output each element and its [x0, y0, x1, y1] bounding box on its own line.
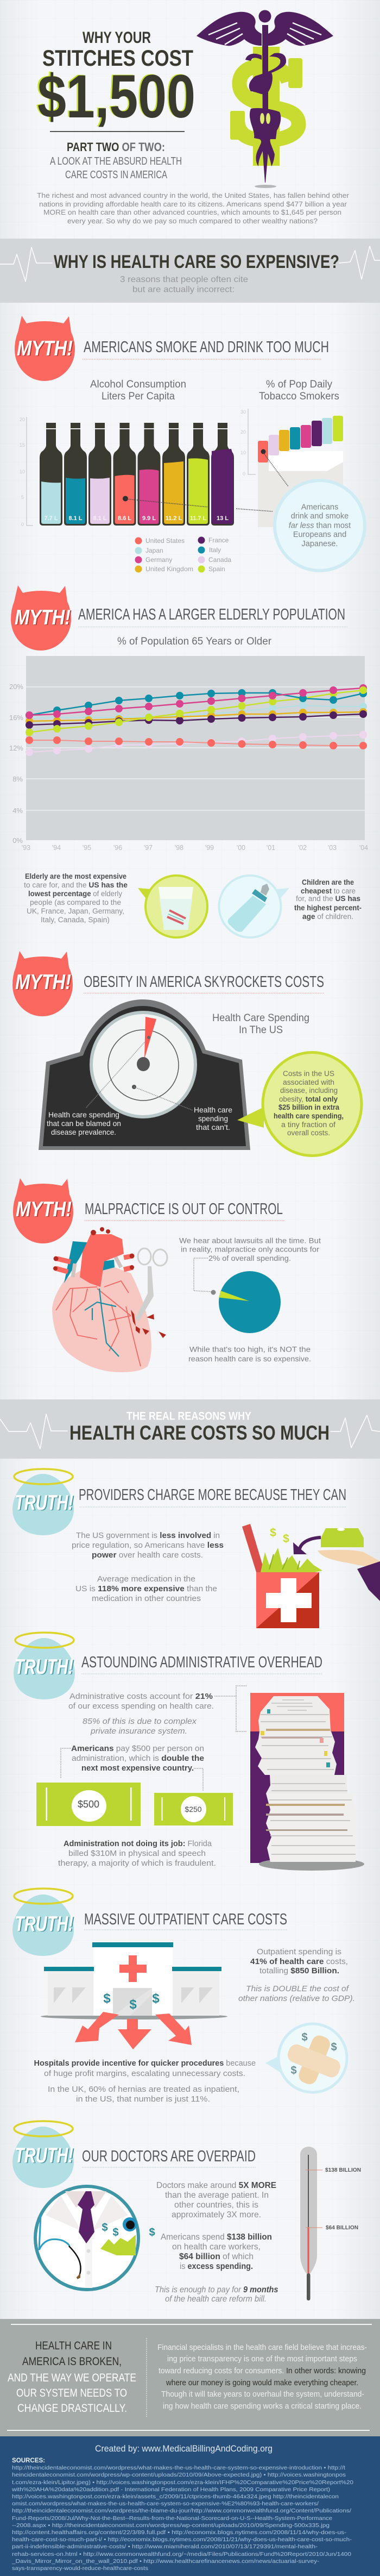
panel: credits and sources: omist.com/wordpress/what-makes-the-us-health-care-system-so-expensive-%E2%80%93-health-care-workers/: [12, 2500, 319, 2507]
illustration: doctor coat: $: [112, 2227, 119, 2239]
text: too high: reason health care is so expensive.: [188, 1354, 311, 1363]
panel: credits and sources: heincidentaleconomist.com/wordpress/wp-content/uploads/2010/09/Above-expected.jpg) • http://voices.washingtonpos: [12, 2472, 346, 2478]
illustration: scale: Health care spending: [48, 1110, 119, 1119]
panel: credits and sources: rehab-services-on.html • http://www.commonwealthfund.org/~/media/Files/Publications/Fund%20Report/2010/Jun/1400: [12, 2551, 351, 2558]
callout: costs associated with disease: health care spending,: [274, 1112, 344, 1120]
chart: alcohol bottles: 13 L: [217, 515, 229, 522]
text: children: the highest percent-: [294, 904, 362, 912]
text: hospitals incentive: of huge profit margins, escalating unnecessary costs.: [44, 2069, 245, 2078]
text: administrative costs: [68, 1692, 214, 1773]
text: elderly: [24, 872, 128, 924]
panel: conclusion: OUR SYSTEM NEEDS TO: [16, 2387, 127, 2399]
text: administration not doing its job: billed $310M in physical and speech: [68, 1849, 206, 1858]
legend: Italy: [209, 546, 221, 554]
text: administration not doing its job: [58, 1839, 216, 1868]
icon: 500 dollar bill: [36, 1783, 141, 1826]
legend: Germany: [145, 556, 172, 564]
illustration: doctor coat: [35, 2186, 155, 2290]
text: lawsuits: We hear about lawsuits all the time. But: [179, 1236, 321, 1245]
callout: drink and smoke less: far less than most: [289, 522, 351, 530]
text: lawsuits: 2% of overall spending.: [208, 1254, 291, 1262]
intro paragraph: [37, 192, 349, 225]
callout: drink and smoke less: Americans: [301, 503, 338, 512]
callout: drink and smoke less: Europeans and: [293, 530, 346, 539]
line chart: population over 65: '94: [52, 844, 61, 852]
text: doctors pay: Doctors make around 5X MORE: [156, 2181, 276, 2190]
truth badge 4: [12, 2121, 74, 2188]
panel: conclusion: CHANGE DRASTICALLY.: [17, 2402, 127, 2415]
text: doctors pay: is excess spending.: [180, 2262, 253, 2271]
text: hospitals incentive: Hospitals provide incentive for quicker procedures because: [34, 2059, 256, 2068]
title block: $1,500: [36, 62, 194, 130]
panel: credits and sources: with%20AHA%20data%20addition.pdf - International Federation of Health Plans, 2009 Comparative Price Report): [11, 2486, 330, 2493]
panel: credits and sources: http://theincidentaleconomist.com/wordpress/what-makes-the-us-health-care-system-so-expensive-introduction • http://t: [12, 2465, 345, 2471]
chart titles: Liters Per Capita: [102, 391, 175, 402]
illustration: heart with scissors: [52, 1227, 167, 1372]
chart: alcohol bottles: [20, 417, 234, 527]
text: hospitals incentive: in the US, that number is just 11%.: [76, 2094, 210, 2104]
band: the real reasons: HEALTH CARE COSTS SO MUCH: [69, 1422, 330, 1444]
heading: doctors overpaid: OUR DOCTORS ARE OVERPAID: [82, 2148, 256, 2165]
truth badge 2: [14, 1633, 75, 1699]
panel: credits and sources: http://voices.washingtonpost.com/ezra-klein/assets_c/2009/11/ctprices-thumb-464x324.jpeg http://theincidentalecon: [12, 2493, 339, 2500]
text: price regulation: [72, 1531, 224, 1603]
truth badge 3: TRUTH!: [15, 1912, 73, 1936]
line chart: population over 65: 20%: [9, 683, 23, 691]
text: doctors pay: approximately 3X more.: [172, 2210, 261, 2219]
panel: credits and sources: Fund-Reports/2008/Jul/Why-Not-the-Best--Results-from-the-National-Scorecard-on-U-S--Health-System-Performance: [12, 2515, 332, 2522]
icon: 500 dollar bill: $500: [78, 1799, 99, 1810]
text: doctors pay: other countries, this is: [174, 2200, 258, 2210]
title block: [36, 29, 195, 181]
callout: drink and smoke less: Japanese.: [302, 540, 338, 548]
text: administrative costs: 85% of this is due to complex: [83, 1717, 197, 1726]
icon: baby bottle: [219, 876, 289, 937]
callout: costs associated with disease: $25 billion in extra: [278, 1103, 339, 1111]
illustration: scale: that can be blamed on: [47, 1119, 121, 1128]
callout: costs associated with disease: disease, including: [280, 1086, 338, 1095]
line chart: population over 65: '97: [144, 844, 153, 852]
text: administrative costs: next most expensive country.: [81, 1764, 194, 1773]
text: administration not doing its job: Administration not doing its job: Florida: [64, 1839, 212, 1848]
icon: 250 dollar bill: $250: [185, 1805, 202, 1814]
chart: alcohol bottles: 11.7 L: [190, 515, 207, 522]
line chart: population over 65: 0%: [12, 836, 23, 845]
myth badge 3: [12, 951, 73, 1016]
panel: conclusion: Though it will take years to overhaul the system, understand-: [161, 2390, 364, 2399]
legend: Canada: [208, 556, 231, 564]
myth badge 3: MYTH!: [16, 971, 72, 995]
myth badge 1: MYTH!: [18, 337, 74, 361]
icon: bandage callout: [265, 2024, 349, 2093]
callout: costs associated with disease: a tiny fraction of: [281, 1121, 335, 1129]
line chart: population over 65: [9, 656, 368, 852]
line chart: population over 65: '02: [298, 844, 307, 852]
text: administration not doing its job: therapy, a majority of which is fraudulent.: [58, 1859, 216, 1868]
truth badge 1: TRUTH!: [15, 1491, 73, 1515]
text: children: Children are the: [302, 878, 354, 886]
illustration: scale: disease prevalence.: [51, 1128, 116, 1136]
chart: alcohol bottles: 20: [20, 417, 25, 422]
chart: alcohol bottles: 15: [20, 442, 25, 448]
text: children: for, and the US has: [296, 895, 360, 903]
panel: conclusion: toward reducing costs for consumers. In other words: knowing: [159, 2366, 366, 2375]
text: outpatient spending: other nations (relative to GDP).: [238, 1994, 355, 2003]
line chart: population over 65: '99: [205, 844, 214, 852]
text: lawsuits: in reality, malpractice only accounts for: [181, 1245, 319, 1254]
illustration: medical kit stuffed with money: [242, 1524, 380, 1628]
line chart: population over 65: '00: [237, 844, 245, 852]
myth badge 2: MYTH!: [15, 606, 71, 629]
text: health care spending in the us: [212, 1012, 309, 1036]
text: outpatient spending: totalling $850 Billion.: [259, 1966, 339, 1975]
chart titles: [90, 379, 339, 402]
text: price regulation: medication in other countries: [92, 1594, 201, 1603]
line chart: population over 65: '03: [328, 844, 337, 852]
heading: larger elderly population: [78, 606, 347, 647]
title block: CARE COSTS IN AMERICA: [65, 169, 167, 181]
chart: alcohol bottles: 10: [20, 469, 25, 474]
chart: tobacco smokers: 0: [243, 471, 245, 477]
panel: conclusion: where our money is going would make everything cheaper.: [166, 2378, 358, 2387]
chart titles: % of Pop Daily: [266, 379, 332, 390]
callout: costs associated with disease: obesity, total only: [279, 1095, 338, 1103]
myth badge 4: MYTH!: [17, 1198, 73, 1222]
truth badge 4: TRUTH!: [15, 2144, 73, 2167]
icon: bandage callout: $: [290, 2065, 297, 2077]
band: why is health care so expensive: 3 reasons that people often cite: [120, 275, 248, 284]
band: the real reasons: THE REAL REASONS WHY: [126, 1410, 251, 1423]
band: the real reasons: [0, 1399, 380, 1459]
illustration: scale: spending: [198, 1114, 228, 1123]
panel: credits and sources: health-care-cost-so-much-part-i/ • http://economix.blogs.nytimes.com/2008/11/21/why-does-us-health-care-cost-so-much-: [12, 2536, 352, 2543]
truth badge 1: [12, 1469, 74, 1535]
myth badge 2: MYTH!: [16, 607, 72, 630]
myth badge 2: [11, 585, 72, 651]
text: health care spending in the us: In The US: [239, 1024, 283, 1036]
chart: alcohol bottles: 8.6 L: [118, 515, 131, 522]
illustration: doctor coat: $: [102, 2222, 108, 2234]
text: price regulation: The US government is less involved in: [76, 1531, 220, 1540]
panel: credits and sources: part-ii-indefensible-administrative-costs/ • http://www.miamiherald.com/2010/07/13/1729391/mental-health-: [12, 2543, 318, 2550]
line chart: population over 65: '01: [267, 844, 275, 852]
line chart: population over 65: '95: [83, 844, 91, 852]
truth badge 1: TRUTH!: [16, 1492, 74, 1515]
line chart: population over 65: 16%: [9, 714, 23, 722]
text: doctors pay: Americans spend $138 billion: [161, 2233, 272, 2242]
icon: 250 dollar bill: [154, 1793, 233, 1825]
illustration: doctor coat: $: [149, 2227, 155, 2239]
chart: alcohol bottles: 8.1 L: [93, 515, 107, 522]
line chart: population over 65: '04: [359, 844, 368, 852]
text: hospitals incentive: In the UK, 60% of hernias are treated as inpatient,: [48, 2085, 239, 2094]
text: elderly: UK, France, Japan, Germany,: [27, 907, 124, 915]
chart: alcohol bottles: 11.2 L: [166, 515, 182, 522]
text: doctors pay: on health care workers,: [172, 2242, 261, 2252]
line chart: population over 65: 4%: [12, 806, 23, 815]
title block: A LOOK AT THE ABSURD HEALTH: [50, 155, 182, 167]
text: administrative costs: of our excess spending on health care.: [68, 1702, 214, 1711]
text: too high: While that's too high, it's NOT the: [189, 1345, 311, 1353]
line chart: population over 65: 12%: [9, 744, 23, 752]
legend: Spain: [208, 565, 225, 573]
text: elderly: Elderly are the most expensive: [25, 872, 126, 880]
panel: conclusion: AMERICA IS BROKEN,: [22, 2355, 122, 2368]
panel: credits and sources: t.com/ezra-klein/Lipitor.jpeg) • http://voices.washingtonpost.com/ezra-klein/IFHP%20Comparative%20Price%20Report%20: [12, 2479, 353, 2486]
text: too high: [188, 1345, 311, 1363]
truth badge 4: TRUTH!: [16, 2144, 74, 2168]
chart: tobacco smokers: [240, 409, 343, 527]
text: doctors pay: [155, 2181, 278, 2304]
line chart: population over 65: '98: [175, 844, 183, 852]
illustration: hospital: [41, 1942, 227, 2049]
legend: Japan: [145, 547, 163, 554]
legend: France: [208, 536, 229, 544]
text: elderly: people (as compared to the: [30, 898, 121, 906]
text: outpatient spending: [238, 1947, 355, 2003]
illustration: hospital: $: [103, 1991, 111, 2006]
panel: credits and sources: http://content.healthaffairs.org/content/22/3/89.full.pdf • http://economix.blogs.nytimes.com/2008/11/14/why-does-us-: [12, 2529, 347, 2536]
band: why is health care so expensive: but are actually incorrect:: [132, 285, 235, 295]
panel: conclusion: HEALTH CARE IN: [35, 2340, 112, 2352]
text: price regulation: power over health care costs.: [92, 1550, 203, 1560]
icon: caduceus with dollar sign: [197, 10, 333, 188]
chart titles: Alcohol Consumption: [90, 379, 186, 390]
title block: STITCHES COST: [42, 45, 193, 71]
chart: alcohol bottles: 8.1 L: [68, 515, 83, 522]
callout: drink and smoke less: [275, 480, 365, 571]
panel: credits and sources: Created by: www.MedicalBillingAndCoding.org: [95, 2443, 273, 2454]
text: price regulation: Average medication in the: [97, 1574, 195, 1584]
panel: credits and sources: --2008.aspx • http://theincidentaleconomist.com/wordpress/wp-content/uploads/2010/09/Spending-500x335.jpg: [12, 2522, 330, 2529]
pie chart: 2 percent: [194, 1258, 281, 1333]
truth badge 3: TRUTH!: [16, 1913, 74, 1936]
legend: United Kingdom: [145, 565, 193, 573]
legend: [135, 536, 231, 573]
callout: drink and smoke less: drink and smoke: [291, 512, 349, 521]
icon: glass with dentures: [138, 876, 207, 937]
text: elderly: lowest percentage of elderly: [28, 890, 122, 898]
title block: PART TWO OF TWO:: [67, 140, 165, 154]
text: children: cheapest to care: [301, 887, 356, 895]
illustration: scale: that can't.: [196, 1123, 230, 1131]
illustration: stack of paperwork: [250, 1693, 364, 1871]
truth badge 2: TRUTH!: [16, 1656, 74, 1679]
dotted connectors: [123, 453, 288, 511]
text: elderly: to care for, and the US has the: [24, 881, 128, 889]
panel: credits and sources: [0, 2436, 380, 2576]
heading: malpractice: MALPRACTICE IS OUT OF CONTROL: [85, 1201, 283, 1218]
line chart: population over 65: '96: [113, 844, 122, 852]
heading: outpatient care: MASSIVE OUTPATIENT CARE COSTS: [84, 1911, 287, 1928]
panel: credits and sources: says-transparency-would-reduce-healthcare-costs: [12, 2565, 148, 2572]
chart: alcohol bottles: 7.7 L: [44, 515, 58, 522]
illustration: medical kit stuffed with money: $: [283, 1533, 289, 1545]
legend: United States: [145, 537, 185, 545]
icon: bandage callout: $: [331, 2041, 337, 2053]
chart: tobacco smokers: 20: [240, 429, 246, 435]
intro paragraph: The richest and most advanced country in the world, the United States, has fallen behind other: [37, 192, 349, 199]
text: administrative costs: Administrative costs account for 21%: [69, 1692, 213, 1701]
callout: costs associated with disease: overall costs.: [287, 1129, 330, 1137]
band: why is health care so expensive: [0, 239, 380, 303]
text: children: [294, 878, 362, 921]
callout: costs associated with disease: Costs in the US: [283, 1070, 334, 1078]
line chart: population over 65: '93: [22, 844, 30, 852]
heading: larger elderly population: % of Population 65 Years or Older: [117, 636, 272, 647]
panel: credits and sources: http://theincidentaleconomist.com/wordpress/the-blame-du-jour/http://www.commonwealthfund.org/Content/Publications/: [12, 2508, 351, 2514]
truth badge 3: [12, 1889, 74, 1956]
dotted connectors: administration: [61, 1686, 246, 1791]
panel: conclusion: ing how health care spending works a critical starting place.: [163, 2402, 362, 2411]
panel: conclusion: [0, 2319, 380, 2436]
title block: WHY YOUR: [83, 29, 151, 47]
illustration: scale: Health care: [194, 1105, 232, 1114]
chart: alcohol bottles: 0: [21, 522, 24, 527]
illustration: medical kit stuffed with money: $: [270, 1527, 276, 1539]
text: price regulation: US is 118% more expensive than the: [75, 1584, 217, 1593]
illustration: scale: [39, 999, 250, 1150]
text: administrative costs: private insurance system.: [90, 1727, 187, 1736]
illustration: hospital: $: [152, 1991, 160, 2006]
icon: bandage callout: $: [301, 2031, 308, 2043]
text: price regulation: price regulation, so Americans have less: [72, 1541, 224, 1550]
chart: alcohol bottles: 9.9 L: [142, 515, 156, 522]
callout: costs associated with disease: associated with: [283, 1078, 334, 1086]
illustration: hospital: $: [129, 1997, 137, 2012]
callout: costs associated with disease: [237, 1052, 362, 1155]
text: children: age of children.: [302, 912, 353, 921]
text: doctors pay: of the health care reform bill.: [165, 2294, 267, 2304]
panel: credits and sources: SOURCES:: [12, 2456, 45, 2464]
text: administrative costs: Americans pay $500 per person on: [71, 1744, 204, 1753]
illustration: thermometer: $138 BILLION: [325, 2167, 361, 2173]
text: outpatient spending: This is DOUBLE the cost of: [246, 1984, 350, 1993]
chart: tobacco smokers: 30: [240, 409, 246, 415]
intro paragraph: every year. So why do we pay so much compared to other wealthy nations?: [67, 217, 318, 225]
title block: $1,500: [37, 62, 195, 130]
myth badge 4: [13, 1178, 73, 1243]
chart: tobacco smokers: 10: [240, 450, 246, 455]
myth badge 1: [15, 316, 75, 381]
text: elderly: Italy, Canada, Spain): [41, 916, 110, 924]
text: outpatient spending: 41% of health care costs,: [250, 1957, 348, 1966]
line chart: population over 65: 8%: [12, 775, 23, 783]
panel: credits and sources: _Davis_Mirror_Mirror_on_the_wall_2010.pdf • http://www.healthcarefinancenews.com/news/actuarial-survey-: [11, 2558, 320, 2565]
panel: conclusion: AND THE WAY WE OPERATE: [8, 2372, 136, 2384]
text: health care spending in the us: Health Care Spending: [212, 1012, 309, 1024]
truth badge 2: TRUTH!: [15, 1655, 73, 1679]
intro paragraph: MORE on health care than other advanced countries, which amounts to $1,645 per person: [43, 209, 341, 216]
text: outpatient spending: Outpatient spending is: [257, 1947, 341, 1956]
text: doctors pay: $64 billion of which: [179, 2252, 254, 2261]
text: hospitals incentive: [34, 2059, 256, 2104]
text: doctors pay: than the average patient. In: [165, 2191, 269, 2200]
text: administrative costs: administration, which is double the: [72, 1754, 204, 1763]
illustration: thermometer: $64 BILLION: [326, 2225, 358, 2231]
panel: conclusion: ing price transparency is one of the most important steps: [167, 2354, 357, 2364]
illustration: thermometer: [300, 2147, 361, 2300]
myth badge 3: MYTH!: [15, 971, 71, 994]
myth badge 4: MYTH!: [16, 1198, 72, 1221]
text: doctors pay: This is enough to pay for 9 months: [155, 2285, 278, 2294]
intro paragraph: nations in providing affordable health care to its citizens. Americans spend $477 billion a year: [39, 201, 347, 208]
text: lawsuits: [179, 1236, 321, 1262]
myth badge 1: MYTH!: [17, 337, 73, 360]
chart: alcohol bottles: 5: [21, 495, 24, 500]
chart titles: Tobacco Smokers: [259, 391, 339, 402]
